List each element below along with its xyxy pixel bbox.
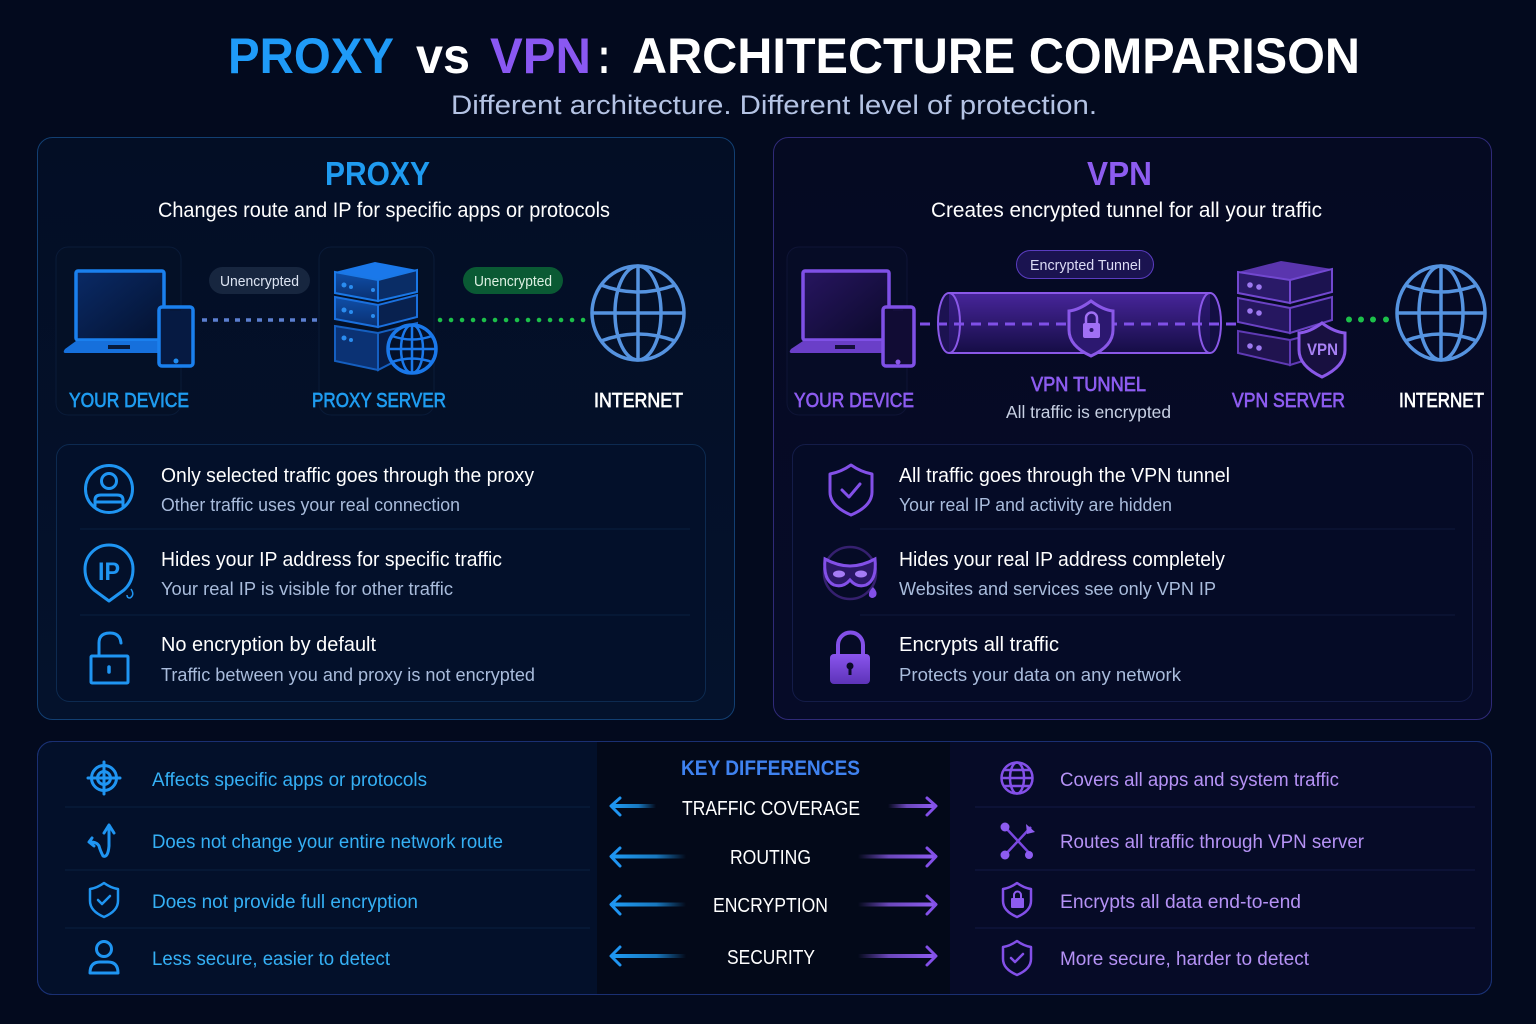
key differences heading: KEY DIFFERENCES [681, 757, 860, 780]
column: proxy differences: Does not provide full encryption [152, 892, 418, 913]
device labels: YOUR DEVICE [794, 389, 914, 412]
vpn diagram [787, 247, 1485, 422]
icon: user circle [86, 466, 132, 512]
column: vpn differences [1000, 762, 1365, 975]
label: encrypted tunnel [1016, 250, 1154, 278]
row: encryption [611, 895, 936, 917]
column: vpn differences: More secure, harder to detect [1060, 949, 1310, 970]
label: unencrypted: Unencrypted [220, 274, 299, 290]
title [228, 28, 1360, 84]
icon: IP pin [85, 545, 133, 601]
proxy description: Changes route and IP for specific apps or protocols [158, 199, 610, 222]
proxy heading: PROXY [325, 155, 430, 192]
column: proxy differences: Less secure, easier to detect [152, 949, 391, 970]
icon: IP pin: IP [98, 558, 120, 586]
icon: vpn server: VPN [1307, 341, 1338, 359]
feature: selected traffic: Other traffic uses your real connection [161, 495, 460, 515]
icon: target [88, 762, 120, 794]
feature: selected traffic: Only selected traffic goes through the proxy [161, 465, 534, 487]
device labels [794, 373, 1484, 422]
feature: hides IP [161, 549, 502, 599]
icon: shield check [90, 883, 118, 917]
title: VPN [490, 28, 591, 84]
feature: hides IP: Hides your IP address for specific traffic [161, 549, 502, 571]
feature: all traffic: All traffic goes through the VPN tunnel [899, 465, 1230, 487]
feature: hides IP: Your real IP is visible for other traffic [161, 579, 453, 599]
feature: all traffic: Your real IP and activity are hidden [899, 495, 1172, 515]
feature: no encryption [161, 634, 535, 685]
title: ARCHITECTURE COMPARISON [632, 28, 1360, 84]
icon: shield check [830, 465, 872, 515]
device labels: VPN SERVER [1232, 389, 1345, 412]
icon: mask [824, 547, 877, 599]
device labels: All traffic is encrypted [1006, 402, 1171, 422]
feature: no encryption: No encryption by default [161, 634, 376, 656]
device labels: VPN TUNNEL [1031, 373, 1146, 396]
column: proxy differences [88, 762, 503, 973]
subtitle: Different architecture. Different level of protection. [451, 90, 1097, 120]
icon: shield check [1003, 941, 1031, 975]
row: encryption: ENCRYPTION [713, 895, 828, 917]
feature: hides real IP: Websites and services see only VPN IP [899, 579, 1216, 599]
icon: globe [1002, 762, 1032, 794]
row: traffic coverage [611, 798, 936, 820]
title: vs [416, 28, 470, 84]
icon: globe internet [592, 266, 684, 360]
device labels [69, 389, 683, 412]
device labels: INTERNET [594, 389, 683, 412]
feature: hides real IP [899, 549, 1225, 599]
icon: network routes [1000, 822, 1035, 860]
feature: selected traffic [161, 465, 534, 515]
column: proxy differences: Affects specific apps or protocols [152, 770, 427, 791]
row: security [611, 947, 936, 969]
vpn description: Creates encrypted tunnel for all your traffic [931, 199, 1322, 222]
row: traffic coverage: TRAFFIC COVERAGE [682, 798, 860, 820]
panel: key differences [38, 742, 1492, 994]
vpn feature list [792, 444, 1472, 702]
device labels: PROXY SERVER [312, 389, 446, 412]
label: unencrypted [209, 267, 310, 294]
icon: laptop and phone [64, 271, 193, 366]
title: PROXY [228, 28, 394, 84]
feature: all traffic [899, 465, 1230, 515]
icon: laptop and phone [790, 271, 914, 366]
proxy feature list [56, 444, 706, 702]
connection: unencrypted dotted line [202, 318, 318, 322]
label: unencrypted green: Unencrypted [474, 274, 552, 290]
row: security: SECURITY [727, 947, 815, 969]
feature: no encryption: Traffic between you and proxy is not encrypted [161, 665, 535, 685]
label: encrypted tunnel: Encrypted Tunnel [1030, 258, 1141, 274]
feature: encrypts all [899, 634, 1182, 685]
proxy diagram [56, 247, 684, 415]
icon: solid lock [830, 632, 870, 684]
icon: open lock [91, 633, 128, 683]
icon: shield lock [1003, 883, 1031, 917]
device labels: YOUR DEVICE [69, 389, 189, 412]
icon: proxy server [335, 262, 436, 373]
feature: encrypts all: Protects your data on any network [899, 665, 1182, 685]
column: proxy differences: Does not change your entire network route [152, 832, 503, 853]
connection: green dots [1346, 316, 1389, 322]
icon: globe internet [1397, 266, 1485, 360]
label: unencrypted green [463, 267, 563, 294]
row: routing [611, 847, 936, 869]
feature: hides real IP: Hides your real IP address completely [899, 549, 1225, 571]
icon: encrypted tunnel [920, 293, 1238, 356]
icon: split route arrows [89, 825, 114, 856]
column: vpn differences: Routes all traffic through VPN server [1060, 832, 1365, 853]
icon: vpn server [1238, 261, 1345, 377]
vpn heading: VPN [1087, 155, 1152, 192]
column: vpn differences: Covers all apps and system traffic [1060, 770, 1339, 791]
column: vpn differences: Encrypts all data end-to-end [1060, 892, 1301, 913]
title: : [598, 28, 610, 84]
panel: proxy [38, 138, 734, 720]
panel: vpn [774, 138, 1492, 720]
device labels: INTERNET [1399, 389, 1484, 412]
feature: encrypts all: Encrypts all traffic [899, 634, 1059, 656]
row: routing: ROUTING [730, 847, 811, 869]
connection: green dotted line [440, 318, 585, 322]
icon: user [90, 942, 118, 973]
